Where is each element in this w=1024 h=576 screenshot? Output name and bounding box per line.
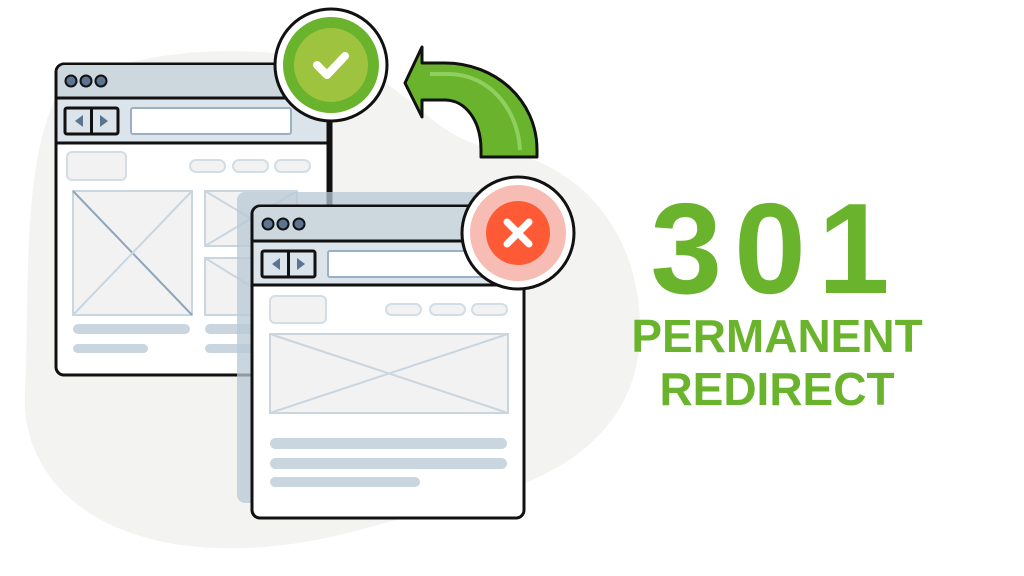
subtitle: permanent redirect (631, 310, 923, 415)
title: 301: 301 (650, 177, 902, 321)
panel: front browser window (252, 206, 524, 518)
shadow of front window (237, 192, 509, 503)
background blob (25, 51, 640, 548)
subtitle: permanent redirect: PERMANENT (631, 310, 923, 362)
arrow: curved green redirect arrow (405, 47, 537, 157)
icon: green check badge (275, 9, 387, 121)
icon: red x badge (462, 177, 574, 289)
subtitle: permanent redirect: REDIRECT (659, 363, 895, 415)
panel: back browser window (56, 64, 328, 375)
connector line (330, 120, 332, 208)
